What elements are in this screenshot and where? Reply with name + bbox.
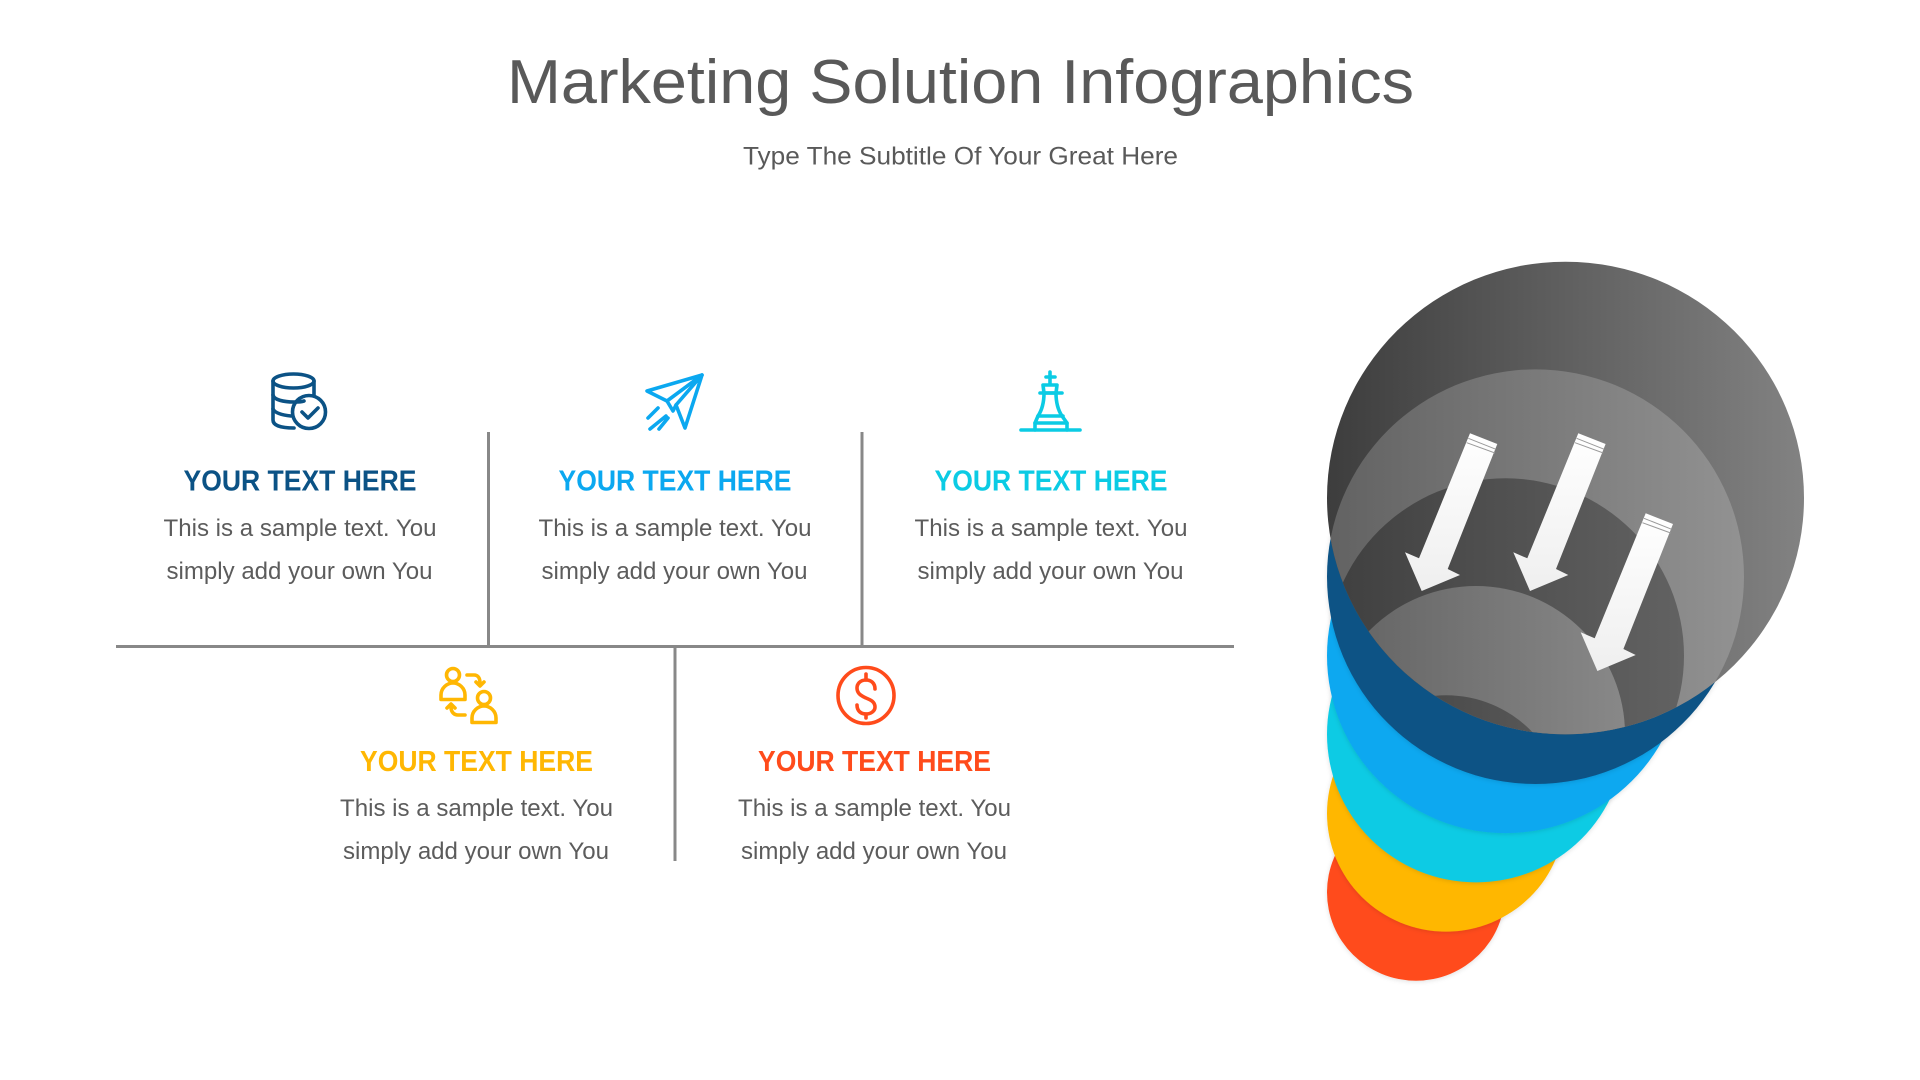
subtitle: Type The Subtitle Of Your Great Here: [743, 142, 1178, 170]
heading 3: YOUR TEXT HERE: [934, 466, 1168, 498]
icon: paper plane: [647, 375, 702, 429]
icon: database check: [273, 374, 326, 428]
funnel layer: yellow: [1327, 695, 1565, 932]
panel: item 1: [164, 374, 436, 585]
arrow 1: [1405, 433, 1497, 591]
body text 5: simply add your own You: [741, 838, 1007, 865]
funnel layer: cyan: [1327, 586, 1625, 882]
panel: item 5: [738, 668, 1011, 865]
panel: item 3: [914, 372, 1188, 585]
body text 3: This is a sample text. You: [914, 515, 1188, 542]
divider lines: [116, 432, 1234, 861]
body text 1: simply add your own You: [166, 558, 432, 585]
body text 1: This is a sample text. You: [164, 515, 436, 542]
body text 5: [738, 795, 1011, 865]
panel: item 4: [340, 668, 613, 865]
heading 5: YOUR TEXT HERE: [758, 746, 991, 778]
heading 4: YOUR TEXT HERE: [360, 746, 593, 778]
arrow 2: [1513, 433, 1606, 591]
funnel graphic: [1327, 262, 1804, 981]
icon: chess king: [1021, 372, 1080, 430]
body text 4: [340, 795, 613, 865]
title: Marketing Solution Infographics: [507, 48, 1414, 117]
funnel layer: blue: [1327, 478, 1684, 833]
body text 2: [538, 515, 812, 585]
panel: item 2: [538, 375, 812, 585]
body text 2: simply add your own You: [542, 558, 808, 585]
icon: people exchange: [441, 668, 496, 722]
body text 3: simply add your own You: [918, 558, 1184, 585]
icon: dollar coin: [838, 668, 894, 724]
funnel layer: navy: [1327, 369, 1744, 784]
funnel layer: orange: [1327, 804, 1505, 981]
body text 2: This is a sample text. You: [538, 515, 812, 542]
funnel mouth with nested grey rings: [1327, 262, 1804, 734]
body text 4: This is a sample text. You: [340, 795, 613, 822]
arrow 3: [1581, 513, 1673, 671]
heading 2: YOUR TEXT HERE: [558, 466, 792, 498]
body text 1: [164, 515, 436, 585]
body text 4: simply add your own You: [343, 838, 609, 865]
body text 5: This is a sample text. You: [738, 795, 1011, 822]
heading 1: YOUR TEXT HERE: [184, 466, 416, 498]
body text 3: [914, 515, 1188, 585]
